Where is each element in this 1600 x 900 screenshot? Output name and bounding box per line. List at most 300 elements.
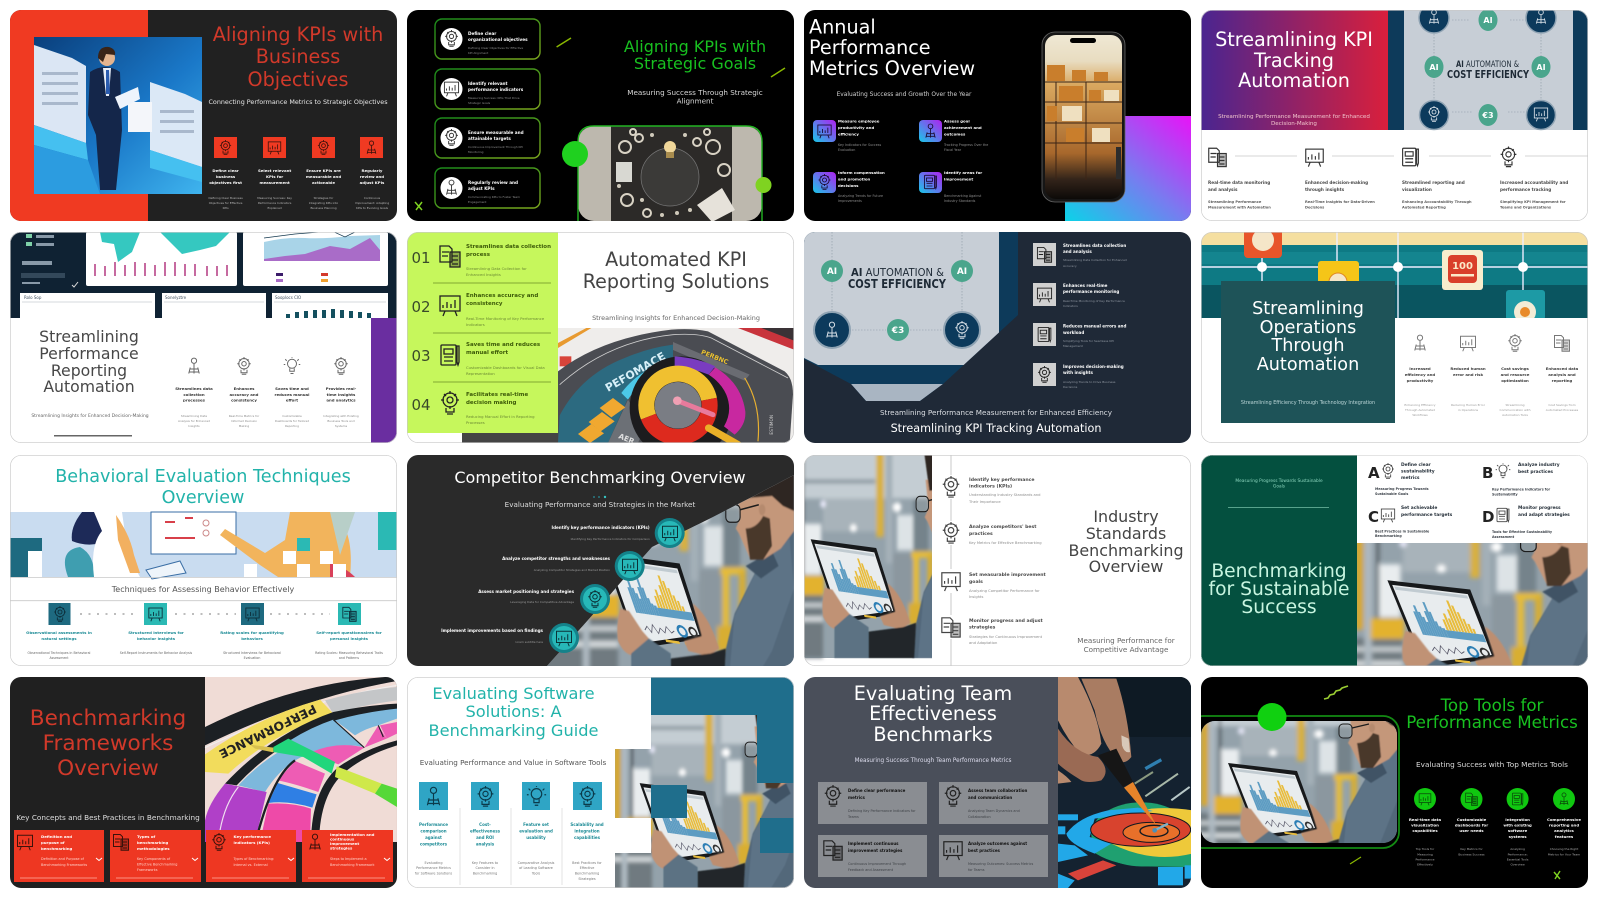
title [1216,31,1372,88]
key point descriptions [208,197,389,210]
benchmark cards: Feedback and Assessment [848,868,894,872]
slide 3 background [804,10,1191,221]
benchmark cards: Collaboration [968,815,991,819]
technique descriptions: Self-Report Instruments for Behavior Analysis [120,651,193,655]
feature labels [419,822,604,846]
title: Streamlining [39,327,139,346]
feature labels: and ROI [476,835,494,840]
title: Behavioral Evaluation Techniques [55,467,351,487]
slide 3: Annual Performance Metrics Overview [804,10,1191,221]
title: for Sustainable [1209,579,1349,600]
framework cards [14,830,393,882]
step labels: Analyze competitors' best [969,524,1037,530]
step labels: Identify key performance indicators (KPIs) [552,525,650,530]
slide 11 border [804,455,1191,666]
list descriptions: Enhanced Insights [466,272,501,277]
metric icons [813,120,942,193]
title [1068,507,1184,576]
title: Evaluating Team [854,682,1012,705]
tool descriptions: Performance [1415,858,1435,862]
key point descriptions: KPIs [223,206,229,210]
tool labels: Customizable [1457,817,1487,822]
objective cards: Defining Clear Objectives for Effective [468,46,523,50]
benefit labels: collection [183,392,205,397]
list descriptions: Representation [466,371,495,376]
objective cards: performance indicators [468,87,524,92]
benefit labels: productivity [1407,378,1434,383]
subtitle: Decision-Making [1271,121,1317,127]
subtitle: Measuring Success Through Strategic [627,88,763,97]
title: Performance [809,36,931,59]
framework cards: Definition and Purpose of [41,857,85,861]
image: pencil on target [1058,677,1192,888]
subtitle: Evaluating Performance and Value in Software Tools [420,758,607,767]
title panel [1221,281,1395,423]
benchmark cards: Implement continuous [848,841,899,846]
benefit descriptions [1404,403,1579,417]
slide 6: Automated KPI Reporting Solutions [407,232,794,460]
point descriptions: Tools for Effective Sustainability [1492,530,1553,534]
title: Streamlining [1252,299,1364,319]
benefit labels: optimization [1501,378,1529,383]
technique labels: natural settings [41,636,77,641]
feature descriptions: Analyzing Trends to Drive Business [1063,380,1116,384]
benefit descriptions: Integrating with Existing [323,414,359,418]
key point labels: business [216,174,236,179]
technique labels [26,630,382,641]
key point labels: measurement [259,180,290,185]
metric labels: Inform compensation [838,170,885,175]
list headings: Facilitates real-time [466,392,529,398]
illustration: businessman with documents [34,37,202,194]
step labels: practices [969,531,993,537]
point labels [1401,462,1570,518]
list headings: manual effort [466,350,508,356]
slide 9: Behavioral Evaluation Techniques Overview [10,455,397,666]
tool descriptions: Key Metrics for [1460,847,1483,851]
benefit labels: Streamlines data [175,386,213,391]
feature descriptions [415,861,602,881]
framework cards: Frameworks [137,868,158,872]
title: Operations [1260,318,1356,338]
benefit labels: time insights [327,392,356,397]
title: Performance Metrics [1406,712,1578,732]
benefit descriptions: Streamlining Performance [1208,200,1262,204]
objective cards: Monitoring [468,150,484,154]
metric labels: improvement [944,176,973,182]
title: Objectives [248,68,348,91]
slide 5: Streamlining Performance Reporting Automation [10,231,397,443]
step descriptions: and Adaptation [969,641,998,645]
slide 8 border [1201,232,1588,443]
benefit descriptions [1208,200,1566,209]
slide 2 background [407,10,794,221]
title: Automation [1238,69,1350,92]
benefit labels [1208,180,1568,192]
subtitle: Measuring Success Through Team Performance Metrics [855,758,1011,764]
framework cards: purpose of [41,840,65,845]
benefit labels [1405,366,1579,383]
benefit descriptions: Measurement with Automation [1208,206,1271,210]
benefit labels: processes [183,398,206,402]
feature labels: Feature set [523,822,549,827]
technique descriptions: Rating Scales: Measuring Behavioral Traits [315,651,383,655]
point labels: Monitor progress [1518,505,1561,511]
feature labels: against [425,835,442,840]
tool icons [1414,788,1575,810]
benefit descriptions: in Operations [1458,408,1479,412]
feature descriptions: Benchmarking [575,872,599,876]
metric descriptions: Fiscal Year [944,148,962,152]
title: Through [1271,336,1344,356]
slide 4 background [1201,10,1588,221]
feature labels: effectiveness [470,828,501,834]
title: Business [256,45,340,68]
framework cards: Types of [137,834,155,839]
step labels: strategies [969,624,996,630]
benefit labels: performance tracking [1500,187,1551,192]
numbers: 03 [412,347,431,365]
technique labels: Structured interviews for [128,630,184,635]
benefit labels: reduces manual [275,392,309,397]
numbers: 04 [412,396,431,414]
image: analytics dashboard: Sonelyztre [165,295,187,300]
objective cards: Ensure measurable and [468,130,524,135]
benefit descriptions: Automated Processes [1546,408,1579,412]
key point labels: Define clear [212,168,239,173]
benefit labels: Enhances [234,386,255,391]
feature labels: and analysis [1063,249,1092,254]
benchmark cards: and communication [968,795,1012,800]
tool descriptions: Choosing the Right [1550,847,1579,851]
subtitle: Connecting Performance Metrics to Strategic Objectives [208,98,388,106]
column dividers [460,808,562,885]
feature descriptions: Accuracy [1063,264,1077,268]
image: analytics dashboard [10,231,397,318]
title: Streamlining KPI [1215,28,1373,51]
benefit labels: Provides real- [326,386,357,391]
framework cards: Benchmarking Frameworks [41,863,87,867]
objective cards: Strategic Goals [468,101,491,105]
technique descriptions: Observational Techniques in Behavioral [28,651,91,655]
step descriptions: Insights [969,595,983,599]
tool labels: visualization [1411,823,1439,828]
key point labels [209,170,384,184]
subtitle: Streamlining Performance Measurement for Enhanced [1218,114,1370,120]
step descriptions [968,493,1043,645]
letter markers [1368,464,1494,526]
step descriptions: Analyzing Competitor Strategies and Market Position [534,568,610,572]
list descriptions: Real-Time Monitoring of Key Performance [466,316,545,321]
list descriptions: Processes [466,420,485,425]
tool labels: reporting and [1549,823,1579,828]
feature descriptions: Evaluating [425,861,442,865]
slide 15 background [804,677,1191,888]
metric labels: outcomes [944,132,966,136]
top subtitle [1235,478,1323,490]
technique descriptions: and Patterns [339,656,359,660]
tool descriptions: Top Tools for [1415,847,1435,851]
subtitle band [10,578,397,601]
key point labels: objectives first [209,180,242,185]
key point descriptions: KPIs to Evolving Goals [356,206,389,210]
benefit labels: Reduced human [1450,366,1486,371]
metric labels: efficiency [838,132,859,136]
framework cards: Internal vs. External [234,863,268,867]
metric descriptions: Analyzing Trends for Future [838,194,883,198]
image: light bulb and targets [578,126,762,222]
image: performance gauge [558,328,794,460]
benchmark cards: best practices [968,848,1001,853]
key point descriptions: Continuous [364,196,381,200]
feature labels: evaluation and [519,828,553,834]
key point descriptions: Defining Clear Business [208,196,243,200]
image: performance gauge: AER [617,431,636,446]
point descriptions [1375,487,1553,539]
feature labels: integration [574,828,600,834]
framework cards: benchmarking [41,846,73,851]
image: performance dial [205,677,397,842]
step descriptions [510,537,650,644]
tool descriptions: Performance: [1508,852,1528,856]
technique descriptions: Evaluation [244,656,260,660]
slide 11: Industry Standards Benchmarking Overview [756,449,1191,666]
title [854,682,1012,746]
key point labels: adjust KPIs [360,180,385,185]
benefit labels: visualization [1402,187,1432,192]
slide 7: Streamlining KPI Tracking Automation (dark) [804,232,1191,443]
image: AI automation and cost efficiency: €3 [891,326,904,336]
benefit labels: accuracy and [230,392,259,397]
list descriptions: Indicators [466,322,485,327]
framework cards: continuous [330,836,355,842]
point labels: performance targets [1401,512,1453,518]
slide 1 background [10,10,397,221]
benefit descriptions: Simplifying KPI Management for [1500,200,1566,204]
list descriptions [466,266,545,425]
benchmark cards: for Teams [968,868,985,872]
subtitle: Streamlining Insights for Enhanced Decision-Making [592,314,760,322]
title [1252,299,1364,375]
key point descriptions: Explained [267,206,282,210]
step labels: Monitor progress and adjust [969,618,1043,624]
feature descriptions: Streamlining Data Collection for Enhanced [1063,258,1127,262]
title: Streamlining KPI Tracking Automation [891,422,1101,435]
framework cards: improvement [330,841,359,846]
list descriptions: Customizable Dashboards for Visual Data [466,365,545,370]
point labels: Set achievable [1401,505,1437,511]
decorative green circle and ticks [1258,686,1560,879]
slide 10: Competitor Benchmarking Overview [407,451,794,688]
title: Benchmarking [30,706,186,731]
key point labels: Regularly [362,168,383,173]
image: performance gauge: ESTIMON [769,415,775,435]
feature descriptions: Comparative Analysis [518,861,555,865]
feature descriptions: Strategies [578,877,596,881]
title: Metrics Overview [809,57,975,80]
slide 10 background [407,455,794,666]
benefit descriptions: Dashboards for Tailored [275,419,309,423]
feature labels: Streamlines data collection [1063,243,1126,248]
title: Automation [43,377,135,396]
benefit labels: Enhanced decision-making [1305,180,1368,185]
slide 16: Top Tools for Performance Metrics [1171,677,1588,888]
feature descriptions: Best Practices for [572,861,602,865]
tool descriptions [1415,847,1580,866]
benefit labels: Cost savings [1501,366,1530,371]
letter markers: B [1482,464,1493,482]
key point labels: actionable [312,180,335,185]
framework cards: Key Components of [137,857,171,861]
benchmark cards: Analyzing Team Dynamics and [968,809,1020,813]
title: Success [1241,597,1317,618]
image: engineer with tablet [756,449,975,658]
subtitle: Evaluating Performance and Strategies in the Market [505,500,695,509]
slide 14: Evaluating Software Solutions [407,677,804,896]
list descriptions: Reducing Manual Effort in Reporting [466,414,535,419]
title [1209,561,1349,618]
image: AI automation and cost efficiency: AI [827,267,837,277]
framework cards: Steps to Implement a [330,857,367,861]
feature labels: performance monitoring [1063,289,1119,294]
step labels: Analyze competitor strengths and weaknesses [502,556,611,561]
step descriptions: Leveraging Data for Competitive Advantage [510,600,574,604]
slide 16 background [1201,677,1588,888]
metric labels: Measure employee [838,118,880,124]
technique labels: Rating scales for quantifying [220,630,284,635]
framework cards: Key performance [234,834,271,839]
benefit descriptions: Communication with [1500,408,1531,412]
benefit descriptions: Cost Savings from [1548,403,1576,407]
slide 5 background [10,232,397,443]
subtitle: Evaluating Success with Top Metrics Tools [1416,760,1568,769]
title: Benchmarking [1211,561,1347,582]
tool labels: with existing [1503,823,1532,828]
title: Benchmarking [1068,541,1184,560]
title: Evaluating Software [432,684,595,703]
benefit descriptions: Enhancing Efficiency [1404,403,1436,407]
objective cards: adjust KPIs [468,186,495,191]
metric descriptions: Tracking Progress Over the [943,143,988,147]
feature labels [1063,243,1126,375]
metric labels: Assess goal [944,118,970,124]
dark footer strip [462,433,558,443]
tool labels: Integration [1505,817,1530,822]
benefit descriptions: Enhancing Accountability Through [1402,200,1472,204]
title: Solutions: A [465,702,562,721]
letter markers: D [1482,508,1494,526]
benchmark cards: improvement strategies [848,848,903,853]
framework cards: benchmarking [137,840,169,845]
feature descriptions: for Software Solutions [415,872,452,876]
top subtitle: Measuring Progress Towards Sustainable [1235,478,1323,484]
title: Performance [39,344,139,363]
step labels: Implement improvements based on findings [441,628,544,633]
technique labels: behaviors [241,636,263,641]
image: AI automation and cost efficiency [804,232,1018,402]
image: engineer with tablet and teal blocks [586,677,804,896]
key point labels: Select relevant [258,168,291,173]
title: Competitor Benchmarking Overview [454,468,746,487]
benefit labels: efficiency and [1405,372,1435,377]
gradient title panel [1201,10,1388,130]
benefit labels: Real-time data monitoring [1208,180,1270,185]
technique descriptions: Assessment [49,656,69,660]
technique descriptions [28,651,383,660]
benefit labels: and resource [1501,372,1530,377]
metric labels: achievement and [944,125,982,130]
key point descriptions: Strategies for [314,196,334,200]
point descriptions: Measuring Progress Towards [1375,487,1429,491]
technique labels: Observational assessments in [26,630,92,635]
benefit labels: through insights [1305,187,1345,192]
title: Benchmarks [873,723,993,746]
benefit labels: reporting [1552,378,1573,383]
benefit descriptions: Insights [188,424,200,428]
framework cards: methodologies [137,846,170,851]
framework cards: Effective Benchmarking [137,862,177,866]
tool descriptions: Business Success [1458,852,1485,856]
benchmark cards: Analyze outcomes against [968,841,1027,846]
tool labels [1409,817,1581,839]
feature icons [419,782,602,810]
purple side band [371,318,397,443]
benefit descriptions: Streamlining [1505,403,1525,407]
feature descriptions [1063,258,1127,389]
image: analytics dashboard: Sooplocs CIO [275,295,301,300]
slide 9 background [10,455,397,666]
title: Aligning KPIs with [624,37,766,56]
point labels: Define clear [1401,462,1432,468]
list headings: Streamlines data collection [466,244,551,250]
title [1406,695,1578,732]
framework cards: Implementation and [330,832,375,837]
title [30,706,186,781]
letter markers: A [1368,464,1380,482]
title: Standards [1086,524,1166,543]
benefit descriptions: Reporting [285,424,299,428]
key point descriptions: Measuring Success: Key [257,196,292,200]
title: Automation [1257,355,1359,375]
step labels: goals [969,579,983,585]
benchmark cards: Assess team collaboration [968,788,1027,793]
step labels [441,525,650,633]
benchmark cards: Define clear performance [848,788,906,793]
image: engineer with tablet [541,451,794,688]
benchmark cards: Measuring Outcomes: Success Metrics [968,862,1033,866]
objective cards: KPI Alignment [468,51,489,55]
slide 12: Benchmarking for Sustainable Success [1201,455,1595,704]
objective cards: Regularly review and [468,180,518,185]
image: engineer with tablet [1319,486,1595,704]
slide 11 background [804,455,1191,666]
icons and connector line [1209,146,1588,167]
feature descriptions: Indicators [1063,304,1078,308]
feature labels: Enhances real-time [1063,283,1108,288]
benefit descriptions: Through Automated [1404,408,1435,412]
title [55,467,351,508]
objective cards: Measuring Success: KPIs That Drive [468,96,520,100]
objective cards [435,19,540,208]
framework cards: Definition and [41,834,72,839]
slide 4: Streamlining KPI Tracking Automation [1201,3,1588,221]
benchmark cards: Continuous Improvement Through [848,862,906,866]
subtitle band: Techniques for Assessing Behavior Effectively [111,585,294,594]
slide 15: Evaluating Team Effectiveness Benchmarks [804,677,1192,888]
icon tiles row [214,137,383,158]
feature descriptions: Decisions [1063,385,1078,389]
feature descriptions: Tools [531,872,540,876]
